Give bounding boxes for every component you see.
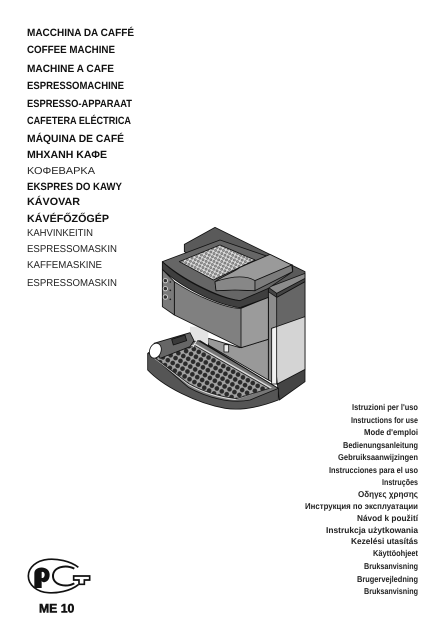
right column: instruction titles: Kezelési utasítás xyxy=(351,536,418,546)
right column: instruction titles: Instructions for use xyxy=(351,415,418,425)
right column: instruction titles: Bruksanvisning xyxy=(364,561,418,571)
right column: instruction titles: Käyttöohjeet xyxy=(373,548,418,558)
right column: instruction titles: Bruksanvisning xyxy=(364,586,418,596)
right column: instruction titles: Istruzioni per l'uso xyxy=(352,402,418,412)
left column: product names: ESPRESSO-APPARAAT xyxy=(27,98,133,110)
left column: product names: ESPRESSOMACHINE xyxy=(27,80,124,92)
right column: instruction titles xyxy=(305,402,419,596)
right column: instruction titles: Návod k použití xyxy=(357,513,419,523)
right column: instruction titles: Instrukcja użytkowania xyxy=(326,525,418,535)
main front body xyxy=(174,282,268,348)
right column: instruction titles: Brugervejledning xyxy=(357,574,418,584)
left column: product names: ΜΗΧΑΝΗ ΚΑΦΕ xyxy=(27,149,107,161)
left column: product names: MÁQUINA DE CAFÉ xyxy=(27,132,124,145)
right column: instruction titles: Mode d'emploi xyxy=(364,427,418,437)
drip tray xyxy=(148,341,278,409)
left column: product names: KAFFEMASKINE xyxy=(27,260,102,271)
left column: product names: CAFETERA ELÉCTRICA xyxy=(27,114,131,127)
illustration: espresso machine xyxy=(147,227,305,409)
steam wand xyxy=(147,333,197,360)
left column: product names: EKSPRES DO KAWY xyxy=(27,181,122,193)
left column: product names: ESPRESSOMASKIN xyxy=(27,244,117,255)
logo code: ME 10 xyxy=(39,601,74,615)
left column: product names: KAHVINKEITIN xyxy=(27,228,93,239)
lower body xyxy=(208,338,268,380)
control panel xyxy=(162,269,174,315)
left column: product names: KÁVÉFŐZŐGÉP xyxy=(27,212,109,225)
left column: product names: ESPRESSOMASKIN xyxy=(27,278,117,289)
left column: product names: MACCHINA DA CAFFÉ xyxy=(27,26,134,39)
right column: instruction titles: Инструкция по эксплуатации xyxy=(305,501,418,511)
right column xyxy=(268,273,305,385)
left column: product names: MACHINE A CAFE xyxy=(27,63,114,75)
left column: product names xyxy=(27,26,134,289)
right column: instruction titles: Gebruiksaanwijzingen xyxy=(338,452,418,462)
logo: PCT certification mark xyxy=(28,559,90,615)
cup warmer grid xyxy=(179,245,255,280)
lid xyxy=(215,254,293,291)
right column: instruction titles: Bedienungsanleitung xyxy=(343,440,418,450)
rear cover xyxy=(184,227,305,297)
top housing xyxy=(162,240,293,301)
left column: product names: KÁVOVAR xyxy=(27,195,80,208)
right column: instruction titles: Instrucciones para el uso xyxy=(329,465,418,475)
left column: product names: COFFEE MACHINE xyxy=(27,44,115,56)
right column: instruction titles: Οδηγες χρησης xyxy=(358,489,419,499)
right column: instruction titles: Instruções xyxy=(382,477,418,487)
left column: product names: ΚΟΦΕΒΑΡΚΑ xyxy=(27,166,95,177)
